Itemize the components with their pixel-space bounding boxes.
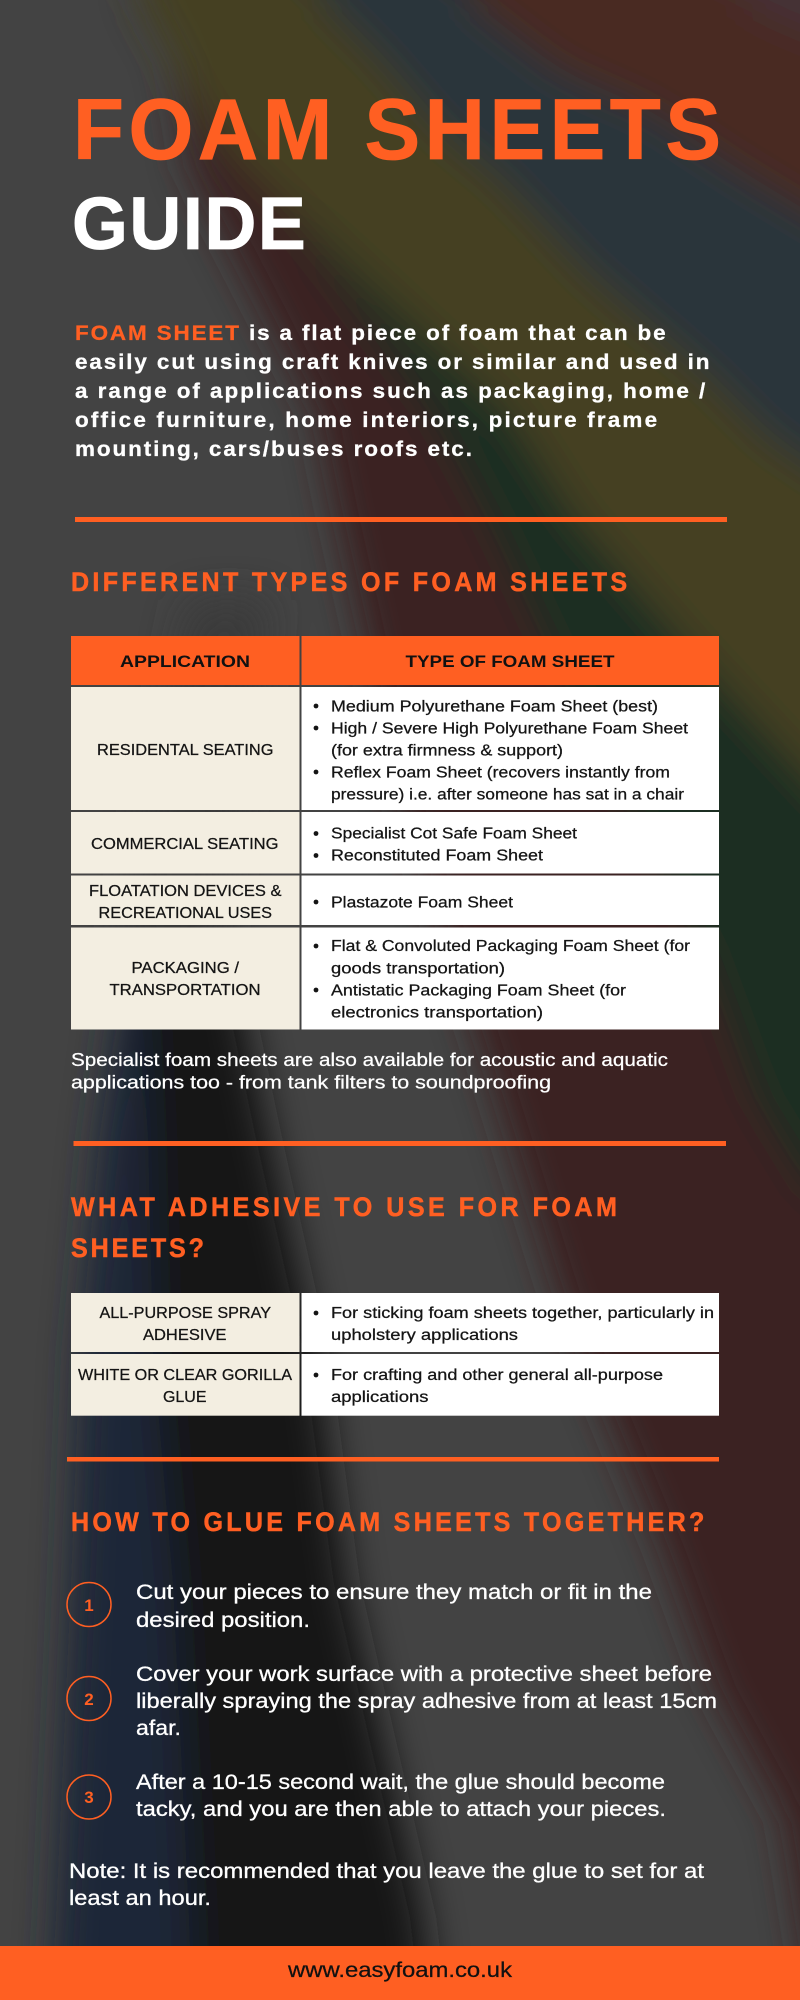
row: packaging and transportation xyxy=(71,928,719,1030)
row: commercial seating xyxy=(71,812,719,874)
step 2: Cover your work surface with a protective sheet before xyxy=(136,1663,712,1686)
table: adhesives xyxy=(71,1293,719,1416)
row: residential seating xyxy=(71,687,719,810)
row: packaging and transportation: Antistatic Packaging Foam Sheet (for xyxy=(331,982,626,1000)
step 3: 3 xyxy=(84,1788,94,1807)
title xyxy=(72,81,721,265)
intro paragraph: office furniture, home interiors, picture frame xyxy=(75,408,657,432)
step 1: 1 xyxy=(84,1596,94,1615)
row: floatation devices xyxy=(71,876,719,925)
note xyxy=(69,1860,704,1910)
specialist foam note xyxy=(71,1050,668,1092)
row: floatation devices: FLOATATION DEVICES & xyxy=(89,883,282,900)
row: residential seating: Medium Polyurethane Foam Sheet (best) xyxy=(331,698,658,716)
note: least an hour. xyxy=(69,1887,211,1910)
row: packaging and transportation: Flat & Convoluted Packaging Foam Sheet (for xyxy=(331,938,690,955)
row: gorilla glue: GLUE xyxy=(163,1389,206,1406)
row: residential seating: Reflex Foam Sheet (recovers instantly from xyxy=(331,764,670,782)
row: gorilla glue: applications xyxy=(331,1389,429,1406)
table header: APPLICATION xyxy=(120,652,250,671)
intro paragraph xyxy=(75,321,710,461)
intro paragraph: FOAM SHEET is a flat piece of foam that can be xyxy=(75,321,666,345)
step 3 xyxy=(67,1771,666,1821)
specialist foam note: Specialist foam sheets are also available for acoustic and aquatic xyxy=(71,1050,668,1070)
step 1: desired position. xyxy=(136,1609,310,1632)
row: residential seating: RESIDENTAL SEATING xyxy=(97,742,274,759)
row: spray adhesive: upholstery applications xyxy=(331,1327,518,1344)
heading: what adhesive xyxy=(71,1191,617,1263)
step 3: tacky, and you are then able to attach your pieces. xyxy=(136,1798,666,1821)
step 2: 2 xyxy=(84,1690,94,1709)
row: spray adhesive: ALL-PURPOSE SPRAY xyxy=(100,1305,271,1322)
row: packaging and transportation: TRANSPORTATION xyxy=(110,982,260,999)
table: types of foam sheets xyxy=(71,636,719,1030)
step 3: After a 10-15 second wait, the glue should become xyxy=(136,1771,665,1794)
row: spray adhesive: ADHESIVE xyxy=(143,1327,226,1344)
row: residential seating: (for extra firmness & support) xyxy=(331,742,563,760)
row: commercial seating: COMMERCIAL SEATING xyxy=(91,836,278,853)
table header xyxy=(71,636,719,685)
row: commercial seating: Reconstituted Foam Sheet xyxy=(331,848,544,864)
row: packaging and transportation: PACKAGING / xyxy=(132,960,240,977)
specialist foam note: applications too - from tank filters to soundproofing xyxy=(71,1072,551,1092)
row: floatation devices: Plastazote Foam Sheet xyxy=(331,894,514,912)
row: packaging and transportation: electronics transportation) xyxy=(331,1004,543,1022)
table header: TYPE OF FOAM SHEET xyxy=(406,652,615,671)
row: packaging and transportation: goods transportation) xyxy=(331,960,505,978)
intro paragraph: easily cut using craft knives or similar and used in xyxy=(75,350,710,374)
row: commercial seating: Specialist Cot Safe Foam Sheet xyxy=(331,826,578,842)
title: FOAM SHEETS xyxy=(73,81,721,177)
step 2: liberally spraying the spray adhesive from at least 15cm xyxy=(136,1690,717,1713)
row: gorilla glue: WHITE OR CLEAR GORILLA xyxy=(78,1367,293,1384)
step 2: afar. xyxy=(136,1717,181,1740)
heading: different types: DIFFERENT TYPES OF FOAM SHEETS xyxy=(71,566,627,597)
row: spray adhesive: For sticking foam sheets together, particularly in xyxy=(331,1305,714,1322)
row: residential seating: pressure) i.e. after someone has sat in a chair xyxy=(331,786,684,804)
note: Note: It is recommended that you leave the glue to set for at xyxy=(69,1860,704,1883)
row: residential seating: High / Severe High Polyurethane Foam Sheet xyxy=(331,720,689,738)
step 2 xyxy=(67,1663,717,1740)
row: floatation devices: RECREATIONAL USES xyxy=(98,905,272,922)
intro paragraph: mounting, cars/buses roofs etc. xyxy=(75,437,472,461)
heading: how to glue: HOW TO GLUE FOAM SHEETS TOGETHER? xyxy=(71,1506,704,1537)
footer bar xyxy=(0,1946,800,2000)
heading: what adhesive: WHAT ADHESIVE TO USE FOR FOAM xyxy=(71,1191,617,1222)
title: GUIDE xyxy=(72,183,306,265)
footer bar: www.easyfoam.co.uk xyxy=(287,1959,513,1982)
step 1: Cut your pieces to ensure they match or fit in the xyxy=(136,1581,652,1604)
row: gorilla glue xyxy=(71,1354,719,1416)
step 1 xyxy=(67,1581,652,1632)
heading: what adhesive: SHEETS? xyxy=(71,1232,204,1263)
row: gorilla glue: For crafting and other general all-purpose xyxy=(331,1367,663,1384)
row: spray adhesive xyxy=(71,1293,719,1352)
intro paragraph: a range of applications such as packaging, home / xyxy=(75,379,705,403)
